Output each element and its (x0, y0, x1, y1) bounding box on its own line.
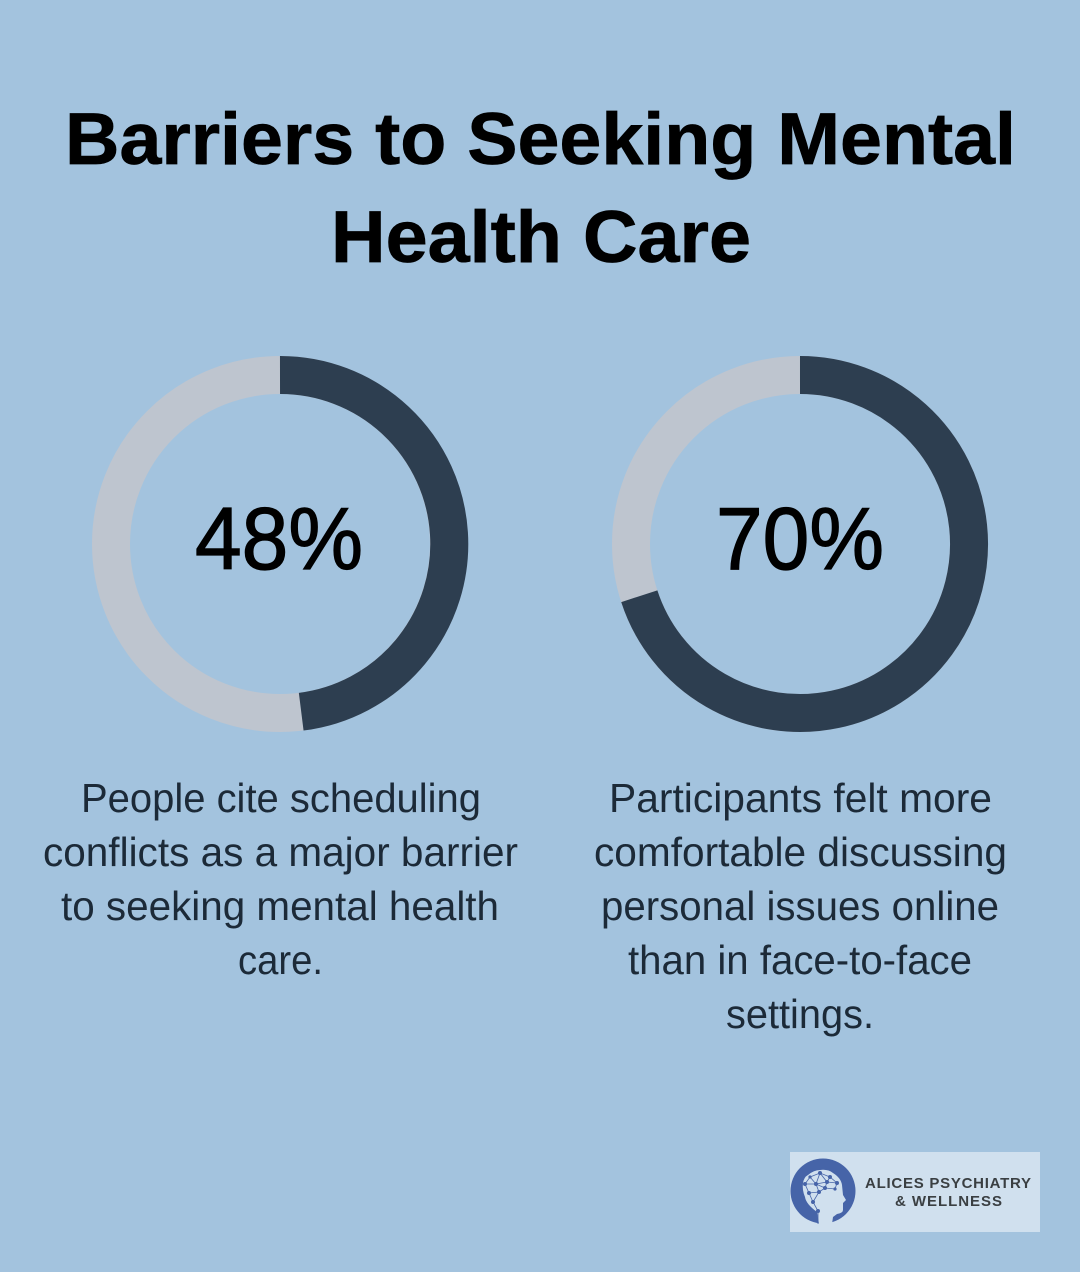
logo wordmark: ALICES PSYCHIATRY (865, 1175, 1031, 1192)
description: scheduling conflicts: People cite scheduling (81, 775, 481, 821)
description: online comfort: personal issues online (601, 883, 999, 929)
description: scheduling conflicts (43, 775, 518, 983)
title: Health Care (331, 197, 751, 278)
title (65, 99, 1016, 278)
description: online comfort: comfortable discussing (594, 829, 1007, 875)
description: scheduling conflicts: conflicts as a major barrier (43, 829, 518, 875)
description: online comfort: settings. (726, 991, 874, 1037)
logo wordmark (865, 1175, 1031, 1210)
description: scheduling conflicts: care. (238, 937, 323, 983)
donut chart: 48% (111, 375, 449, 713)
description: online comfort (594, 775, 1007, 1037)
title: Barriers to Seeking Mental (65, 99, 1016, 180)
value: 70%: 70% (716, 489, 884, 588)
logo wordmark: & WELLNESS (895, 1193, 1002, 1210)
value: 48%: 48% (195, 489, 363, 588)
description: scheduling conflicts: to seeking mental health (61, 883, 499, 929)
icon: head with brain network (790, 1158, 856, 1224)
panel: 70% statistic (594, 375, 1007, 1037)
logo (790, 1152, 1040, 1232)
donut chart: 70% (631, 375, 969, 713)
description: online comfort: Participants felt more (609, 775, 992, 821)
panel: 48% statistic (43, 375, 518, 983)
description: online comfort: than in face-to-face (628, 937, 972, 983)
